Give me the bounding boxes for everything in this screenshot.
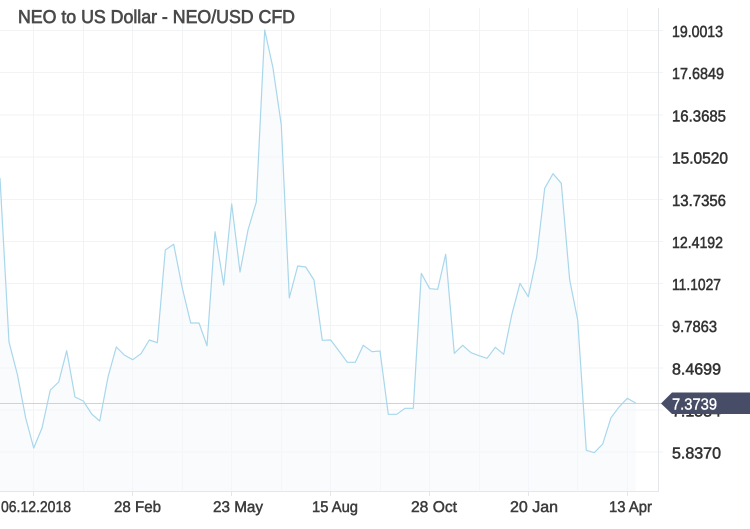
y axis labels: 15.0520 [672, 150, 728, 168]
y axis labels: 8.4699 [672, 362, 721, 378]
y axis labels: 19.0013 [672, 24, 723, 41]
x axis labels: 23 May [213, 499, 263, 516]
y axis labels: 7.1534 [672, 404, 721, 420]
y axis labels: 5.8370 [672, 446, 721, 462]
price line [0, 30, 636, 453]
x axis labels: 28 Oct [411, 499, 458, 516]
x axis labels: 15 Aug [312, 499, 358, 516]
y axis labels: 11.1027 [672, 277, 721, 294]
y axis labels: 13.7356 [672, 193, 726, 210]
current price line [0, 402, 664, 404]
y axis labels: 9.7863 [672, 319, 717, 336]
x axis labels: 20 Jan [510, 499, 558, 516]
current price tag: 7.3739 [672, 396, 717, 414]
x axis labels: 13 Apr [609, 499, 652, 516]
x axis labels: 06.12.2018 [1, 499, 71, 516]
y axis labels: 12.4192 [672, 235, 723, 252]
current price tag [661, 392, 750, 414]
title: NEO to US Dollar - NEO/USD CFD [18, 6, 295, 27]
area fill under price line [0, 30, 636, 491]
y axis labels: 16.3685 [672, 108, 726, 126]
x axis labels: 28 Feb [114, 499, 161, 516]
y axis labels: 17.6849 [672, 66, 724, 83]
y axis labels [672, 24, 728, 462]
x axis labels [1, 499, 652, 516]
